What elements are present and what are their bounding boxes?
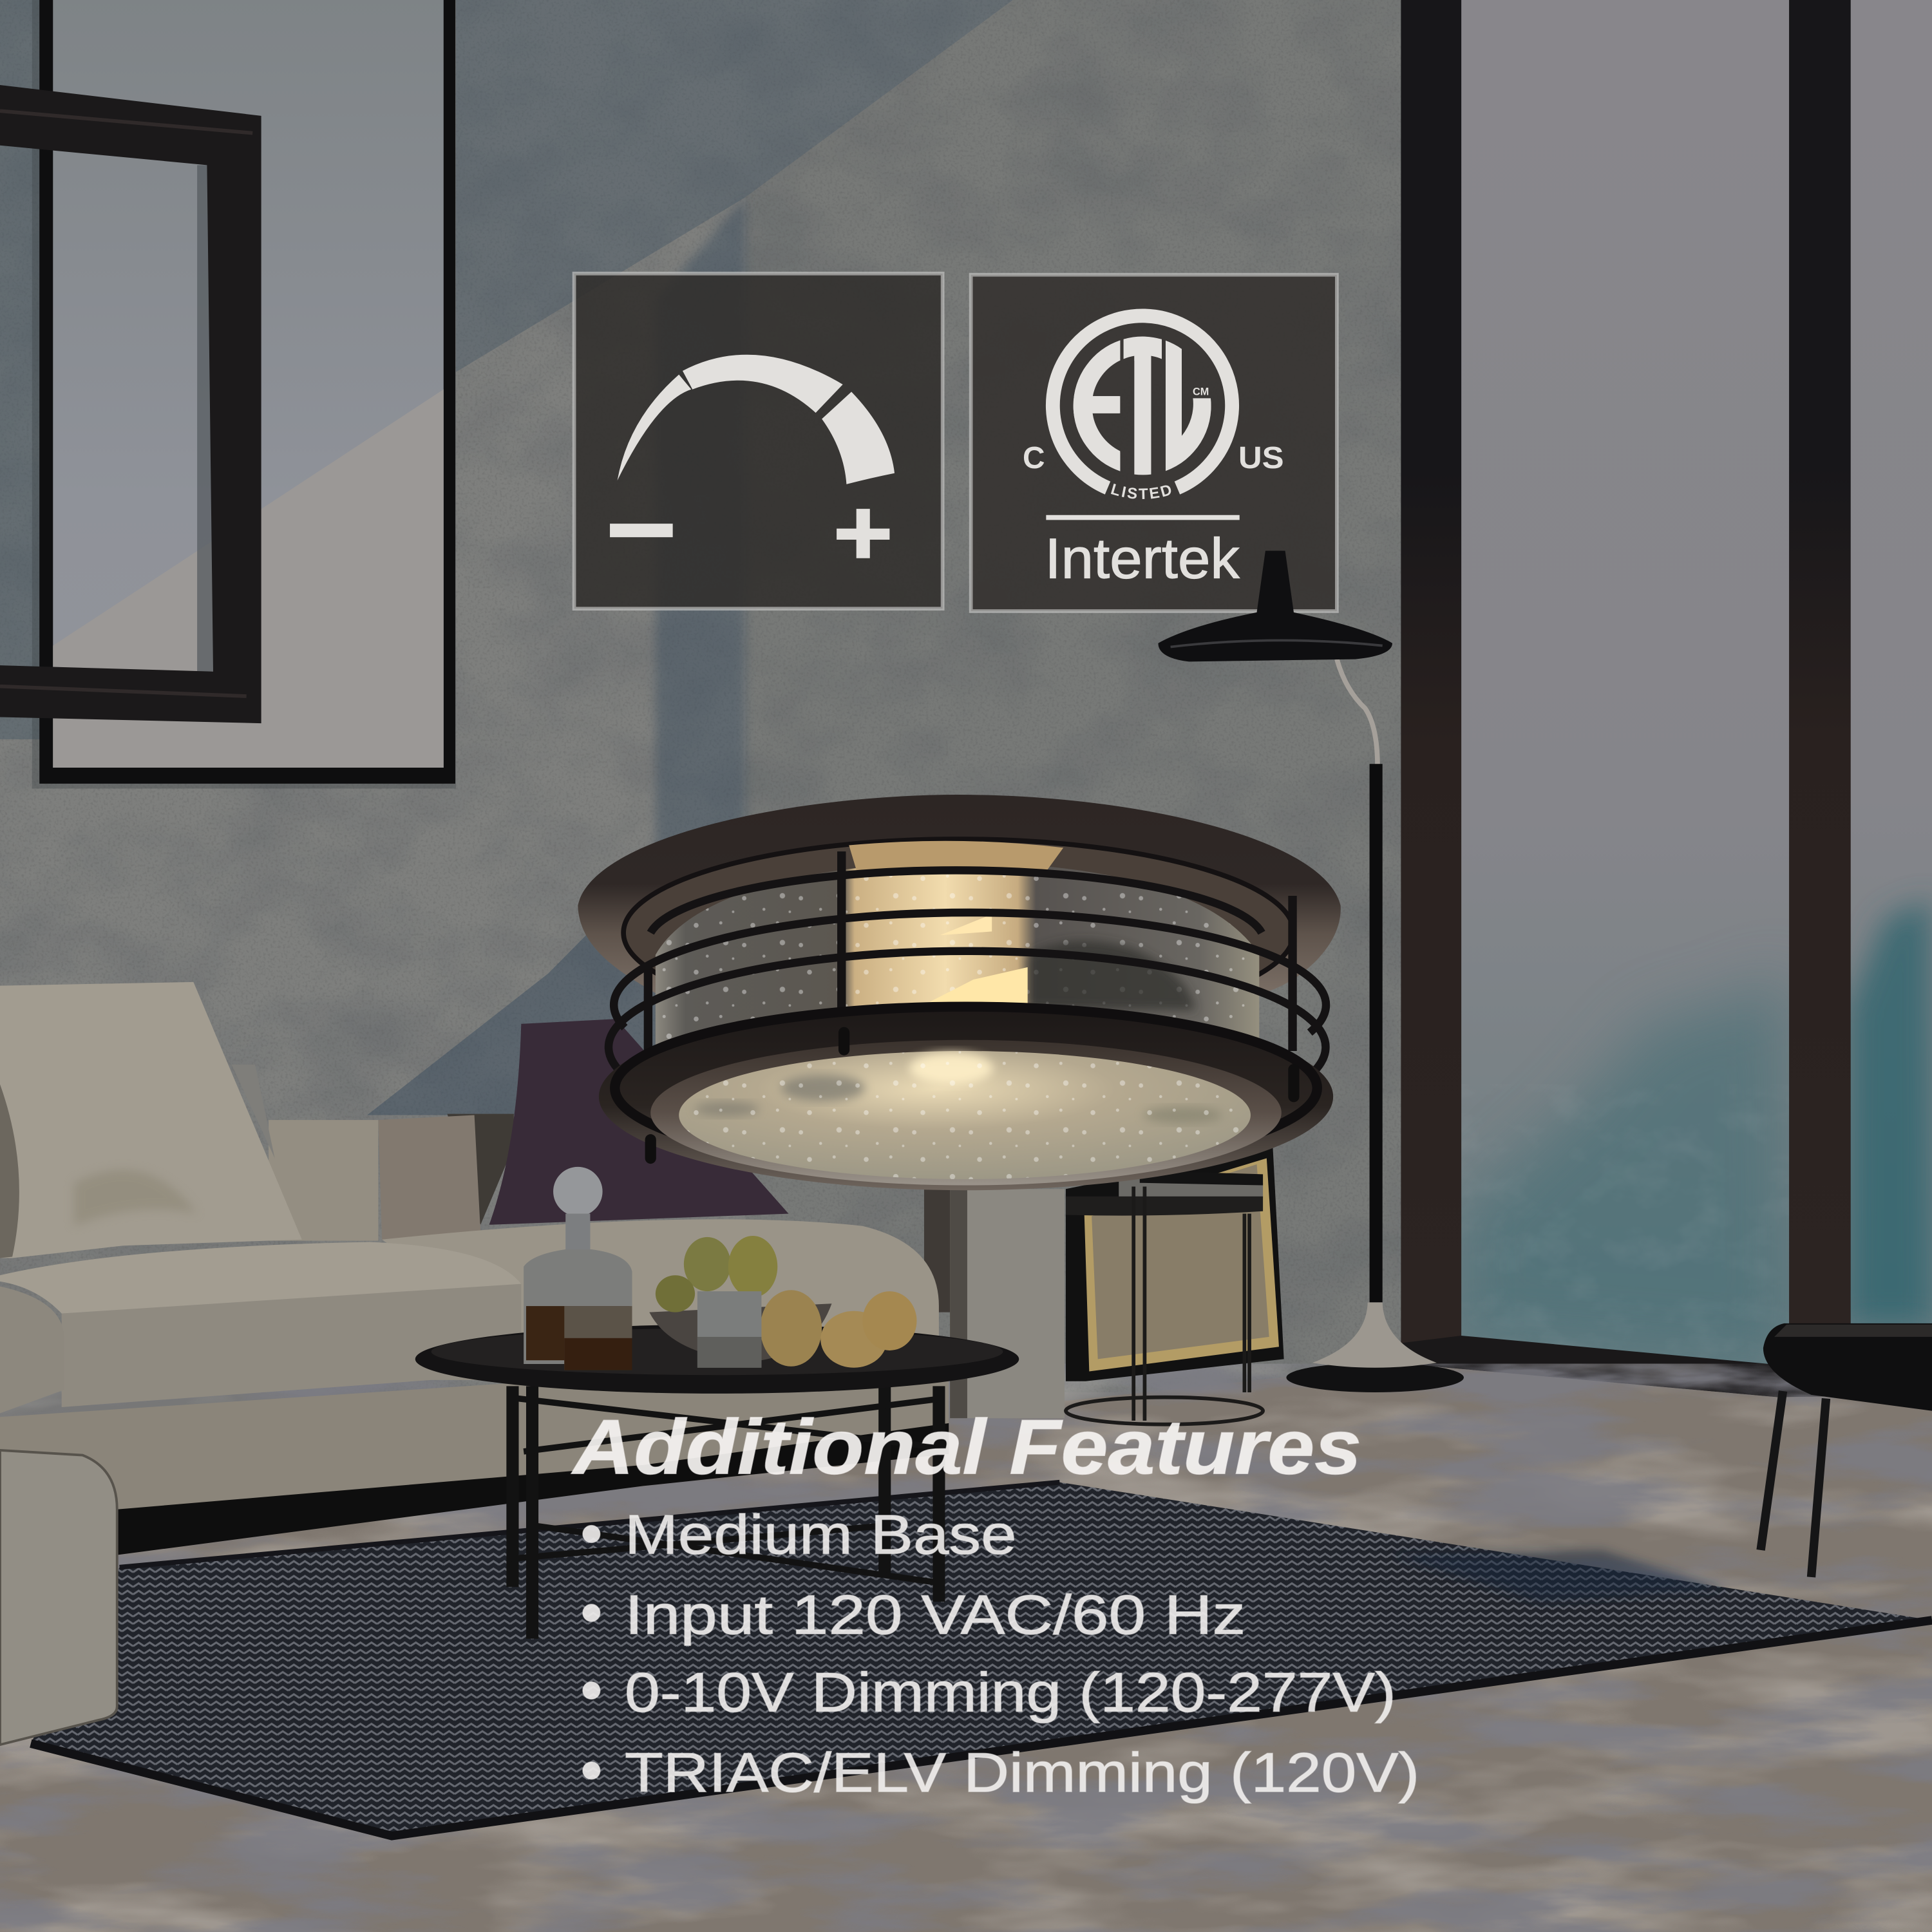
cylinder side table [924,1189,1065,1418]
ceiling plate [578,795,1341,993]
window with foggy forest view [1401,0,1932,1397]
feature list: TRIAC/ELV Dimming (120V) [625,1742,1419,1804]
cage vertical bars [648,851,1293,1051]
concrete floor [0,1364,1932,1932]
front ottoman [0,1450,117,1745]
icon: ETL listed ring: L [1158,296,1220,516]
floor lamp [1158,551,1464,1392]
feature list [583,1504,1419,1804]
label: C mark: C [1023,441,1045,475]
coffee table [415,1325,1019,1639]
background: concrete wall [0,0,1411,1392]
icon: plus sign [837,509,889,558]
label: Intertek: Intertek [1045,526,1240,590]
sofa [0,982,949,1555]
panel: dimmable icon [574,274,943,609]
seeded glass lens [679,1051,1251,1179]
icon: dimmer gauge arc [618,355,895,484]
icon: minus sign [610,524,673,537]
icon: ETL listed ring: LISTED [1110,484,1171,499]
fruit bowl, pears and pomegranates [649,1236,916,1368]
cage bands [609,870,1326,1071]
purple throw pillow [489,1019,788,1225]
glass decanter and tumblers [524,1167,761,1370]
retention pins [650,1032,1294,1158]
panel: ETL Intertek certification [969,273,1339,637]
lower ring [599,1003,1333,1190]
feature list: 0-10V Dimming (120-277V) [625,1662,1396,1724]
feature list: Input 120 VAC/60 Hz [625,1584,1245,1646]
wall picture: mounted poster [32,0,456,788]
stool [1761,1323,1932,1577]
feature list: Medium Base [625,1504,1016,1566]
icon: ETL listed ring: T [1109,296,1180,516]
heading: Additional Features: Additional Features [571,1403,1361,1490]
woven rug [31,1482,1932,1836]
icon: ETL listed ring: CM [1193,386,1209,397]
main product: flush mount ceiling light [578,795,1341,1190]
canvas and small side table [1066,1147,1284,1425]
icon: ETL listed ring [1046,309,1239,499]
label: US mark: US [1238,441,1284,475]
wall picture: dark wooden frame [0,85,261,723]
icon: ETL listed ring: E [1066,296,1128,516]
seeded glass cylinder [656,862,1259,1047]
